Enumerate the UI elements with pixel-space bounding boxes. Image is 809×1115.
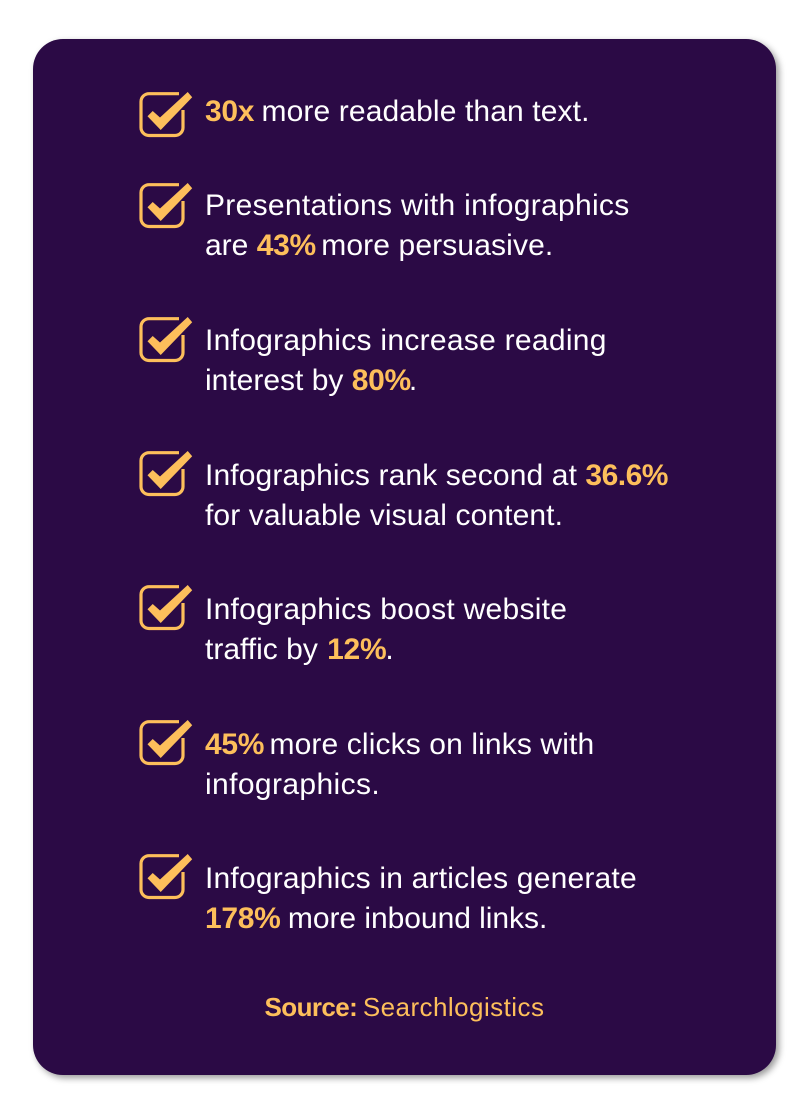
text: stat 7: Infographics in articles generate — [205, 862, 637, 895]
text: stat 7: 178% more inbound links. — [205, 902, 547, 935]
text: stat 6 — [205, 728, 594, 801]
text: source: Source: Searchlogistics — [265, 992, 544, 1022]
text: stat 4: for valuable visual content. — [205, 499, 563, 532]
text: stat 5: Infographics boost website — [205, 593, 567, 626]
icon: checkbox 4 — [139, 451, 192, 496]
text: stat 6: 45% more clicks on links with — [205, 728, 594, 761]
text: stat 2 — [205, 189, 630, 262]
text: stat 1: 30x more readable than text. — [205, 95, 590, 128]
text: stat 7 — [205, 862, 637, 935]
text: stat 6: infographics. — [205, 768, 380, 801]
icon: checkbox 2 — [139, 183, 192, 228]
icon: checkbox 1 — [139, 92, 192, 138]
icon: checkbox 5 — [139, 585, 192, 630]
text: stat 3 — [205, 324, 607, 397]
icon: checkbox 6 — [139, 720, 192, 766]
text: stat 2: Presentations with infographics — [205, 189, 630, 222]
text: stat 5 — [205, 593, 567, 666]
text: stat 3: Infographics increase reading — [205, 324, 607, 357]
text: stat 3: interest by 80%. — [205, 364, 417, 397]
text: stat 5: traffic by 12%. — [205, 633, 394, 666]
text: stat 4 — [205, 459, 668, 532]
icon: checkbox 3 — [139, 317, 192, 362]
icon: checkbox 7 — [139, 854, 192, 900]
text: stat 4: Infographics rank second at 36.6% — [205, 459, 668, 492]
text: stat 2: are 43% more persuasive. — [205, 229, 553, 262]
